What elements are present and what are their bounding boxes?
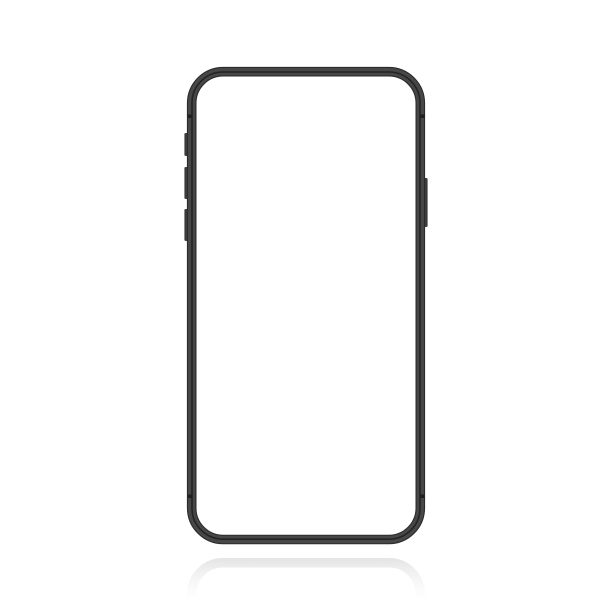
icon: volume down button: [184, 209, 189, 241]
icon: mute switch: [184, 133, 189, 156]
icon: volume up button: [184, 167, 189, 199]
left side buttons: [184, 133, 189, 241]
antenna bands: [188, 114, 424, 498]
phone frame: [192, 72, 420, 539]
reflection below phone: [192, 563, 420, 612]
right side power button: [423, 178, 428, 227]
